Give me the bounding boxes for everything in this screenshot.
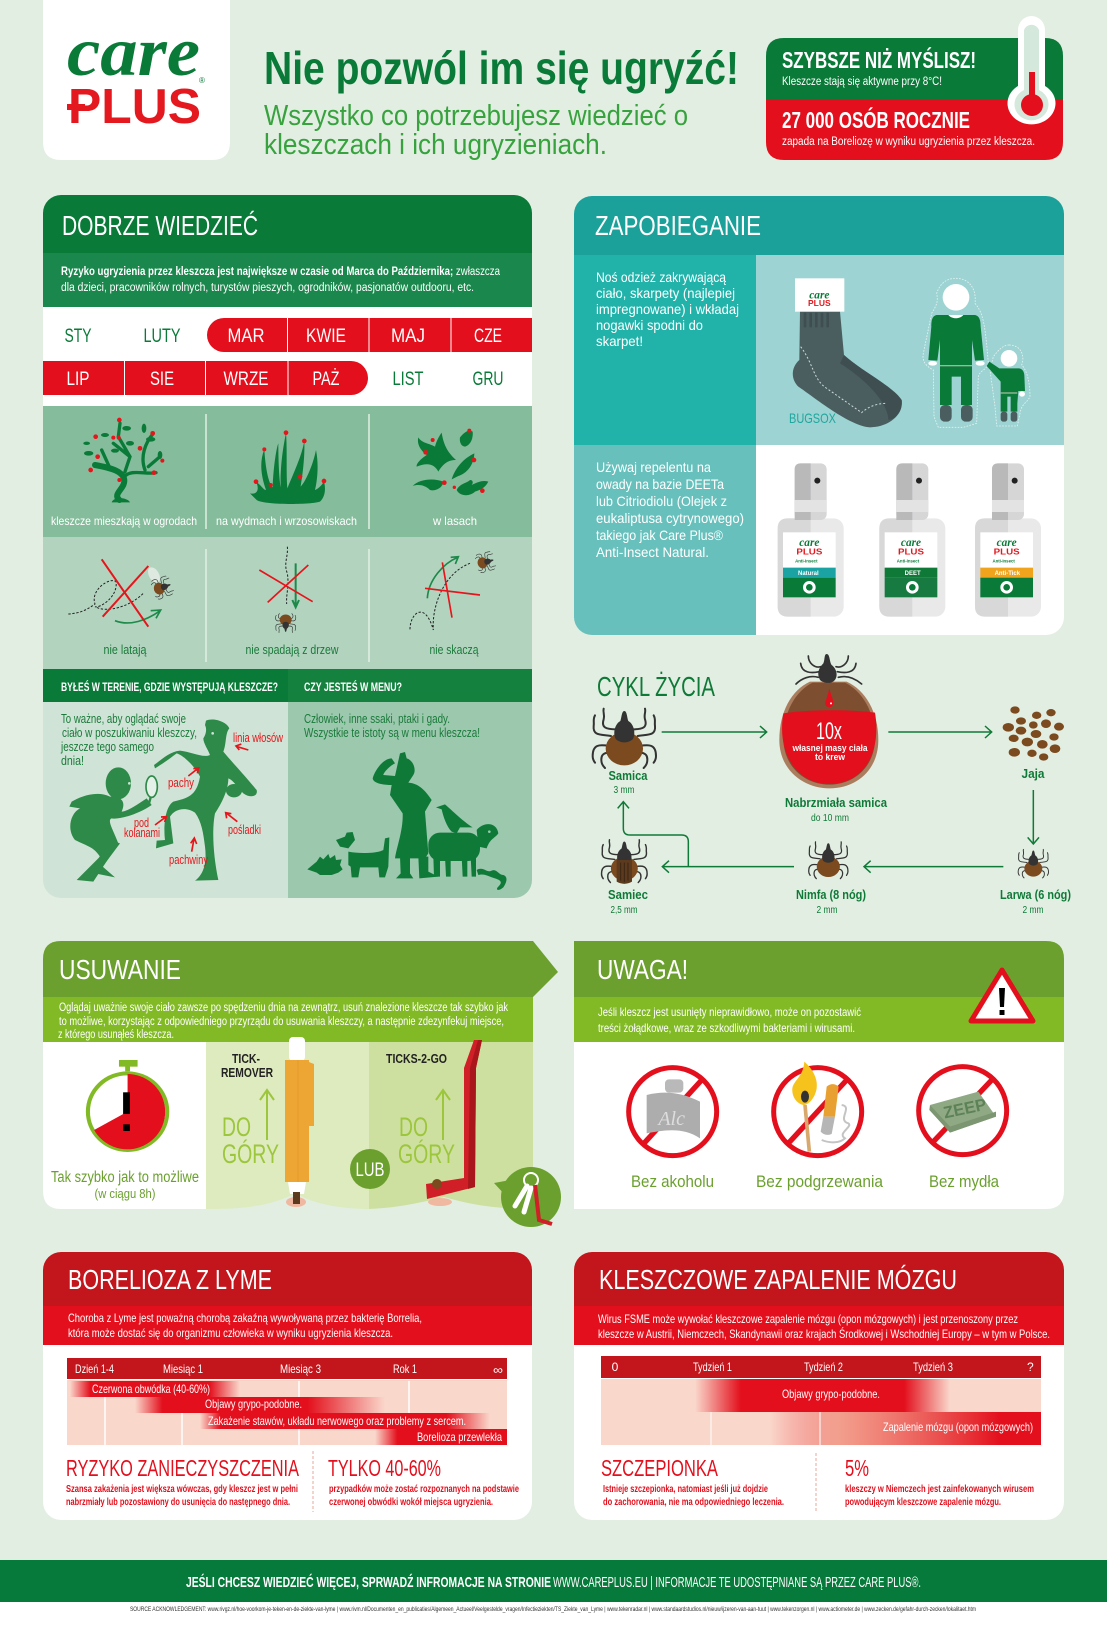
subpanel: body check: ciało w poszukiwaniu kleszczy, — [62, 726, 197, 740]
subpanel: menu (clipped corner) — [288, 669, 532, 898]
icon: dune grass — [250, 430, 326, 504]
stage labels: 2 mm — [1022, 905, 1044, 916]
badge: lub — [350, 1149, 390, 1189]
timeline chart: 0 — [612, 1360, 619, 1374]
blood stat: własnej masy ciała — [792, 743, 868, 753]
stat: vaccine: Istnieje szczepionka, natomiast jeśli już dojdzie — [603, 1483, 768, 1495]
column: tick remover — [206, 1042, 533, 1212]
icon: larva tick — [1018, 849, 1049, 878]
icon: bottle anti-tick: Anti-Insect — [992, 559, 1015, 564]
stat: risk: Szansa zakażenia jest większa wówczas, gdy kleszcz jest w pełni — [66, 1483, 298, 1495]
timeline chart — [601, 1356, 1041, 1445]
arrows — [618, 726, 1039, 873]
icon: female tick — [593, 709, 656, 768]
stat box: 27 000 OSÓB ROCZNIE — [782, 106, 970, 133]
heading band — [574, 1252, 1064, 1306]
repellent products — [756, 445, 1064, 635]
timeline chart: Objawy grypo-podobne. — [782, 1387, 880, 1401]
icon: bottle natural: care — [799, 537, 819, 549]
subpanel: body check: jeszcze tego samego — [60, 740, 154, 754]
icon: nymph tick — [809, 842, 848, 879]
timeline chart: Dzień 1-4 — [75, 1362, 114, 1376]
month calendar: WRZE — [224, 369, 268, 390]
timeline chart: Borelioza przewlekła — [417, 1430, 502, 1444]
myths row — [43, 537, 532, 669]
timeline chart: Tydzień 2 — [804, 1360, 843, 1374]
icon: bottle anti-tick: care — [997, 537, 1017, 549]
icon: garden tree — [83, 418, 164, 502]
stage labels: Larwa (6 nóg) — [1000, 887, 1071, 902]
timeline chart: Miesiąc 1 — [163, 1362, 203, 1376]
repellent advice text: takiego jak Care Plus® — [596, 527, 724, 543]
product: tick remover: REMOVER — [221, 1065, 273, 1080]
intro text — [43, 253, 532, 307]
stat: 5% — [845, 1455, 1034, 1508]
month calendar: LUTY — [144, 326, 181, 347]
section: life cycle — [593, 654, 1071, 916]
repellent advice text — [574, 445, 756, 635]
month calendar: CZE — [474, 326, 502, 347]
icon: no soap: ZEEP — [942, 1095, 988, 1122]
product: ticks-2-go: GÓRY — [398, 1138, 455, 1169]
month calendar: KWIE — [306, 326, 346, 347]
body part labels — [124, 731, 284, 867]
icon: no heating — [774, 1062, 862, 1156]
clothing advice text: Noś odzież zakrywającą — [596, 269, 726, 285]
subpanel: menu (clipped corner): CZY JESTEŚ W MENU? — [304, 679, 402, 694]
icon: bugsox sock: care — [809, 289, 829, 301]
icon: bottle anti-tick — [975, 463, 1041, 617]
heading band: DOBRZE WIEDZIEĆ — [62, 210, 258, 241]
product: tick remover: GÓRY — [222, 1138, 279, 1169]
repellent advice text: Anti-Insect Natural. — [596, 544, 709, 560]
month calendar: GRU — [472, 369, 504, 390]
clothing advice text: ciało, skarpety (najlepiej — [596, 285, 735, 301]
product: tick remover: TICK- — [232, 1051, 260, 1066]
icon: bugsox sock: PLUS — [808, 298, 831, 308]
timeline chart: Objawy grypo-podobne. — [205, 1397, 302, 1411]
title: Nie pozwól im się ugryźć! — [264, 42, 739, 94]
product: tick remover — [221, 1037, 314, 1207]
panel: usuwanie — [43, 941, 561, 1227]
heading band — [574, 196, 1064, 255]
icon: keychain bubble — [494, 1167, 561, 1227]
stage labels: Samica — [608, 768, 648, 783]
caption: ogrody: kleszcze mieszkają w ogrodach — [51, 514, 197, 528]
timeline chart: Zapalenie mózgu (opon mózgowych) — [883, 1420, 1033, 1434]
heading band with arrow: USUWANIE — [59, 954, 181, 985]
icon: bottle natural: Natural — [798, 571, 819, 577]
stat: 5%: 5% — [845, 1455, 869, 1481]
clothing advice text — [574, 255, 756, 445]
month calendar: PAŻ — [312, 369, 340, 390]
panel: zapobieganie — [574, 196, 1064, 635]
icon: no alcohol — [629, 1068, 717, 1156]
caption: nie skaczą: nie skaczą — [430, 642, 479, 657]
heading band: KLESZCZOWE ZAPALENIE MÓZGU — [599, 1264, 957, 1295]
month calendar: STY — [64, 326, 92, 347]
repellent advice text: Używaj repelentu na — [596, 459, 711, 475]
heading band: UWAGA! — [597, 954, 688, 985]
stat: 40-60%: przypadków może zostać rozpoznanych na podstawie — [329, 1483, 519, 1495]
stat: 40-60% — [328, 1455, 519, 1508]
icon: no flying — [68, 559, 175, 627]
body part labels: pachy — [168, 776, 195, 790]
timeline chart: Czerwona obwódka (40-60%) — [92, 1382, 210, 1396]
caption: lasy: w lasach — [432, 514, 477, 528]
icon: covered child — [977, 345, 1030, 426]
stat: risk: RYZYKO ZANIECZYSZCZENIA — [66, 1455, 299, 1481]
body part labels: linia włosów — [233, 731, 284, 745]
instruction text: z którego usunąłeś kleszcza. — [58, 1029, 174, 1041]
stat box: SZYBSZE NIŻ MYŚLISZ! — [782, 46, 976, 73]
timeline chart: Tydzień 3 — [913, 1360, 953, 1374]
intro text: Choroba z Lyme jest poważną chorobą zakaźną wywoływaną przez bakterię Borrelia, — [68, 1311, 422, 1325]
month calendar: LIST — [392, 369, 424, 390]
clothing advice text: nogawki spodni do — [596, 317, 703, 333]
subpanel: body check: BYŁEŚ W TERENIE, GDZIE WYSTĘPUJĄ KLESZCZE? — [61, 679, 278, 694]
timeline chart: ? — [1027, 1360, 1034, 1374]
warning text: treści żołądkowe, wraz ze szkodliwymi bakteriami i wirusami. — [598, 1021, 855, 1035]
icon: male tick — [602, 840, 647, 884]
intro text: dla dzieci, pracowników rolnych, turystów pieszych, ogrodników, pasjonatów outdooru, etc. — [61, 282, 474, 294]
stage labels: Nimfa (8 nóg) — [796, 887, 866, 902]
product: ticks-2-go: TICKS-2-GO — [386, 1051, 447, 1066]
caption: no soap: Bez mydła — [929, 1172, 999, 1191]
stat: vaccine: do zachorowania, nie ma odpowiedniego leczenia. — [603, 1496, 784, 1508]
subtitle — [264, 100, 688, 161]
warning text: Jeśli kleszcz jest usunięty nieprawidłowo, może on pozostawić — [598, 1005, 861, 1019]
footer band — [0, 1560, 1107, 1602]
stage labels: Jaja — [1022, 766, 1045, 781]
stat box — [766, 38, 1063, 160]
repellent advice text: owady na bazie DEETa — [596, 476, 724, 492]
icon: bottle natural: Anti-Insect — [795, 559, 818, 564]
stat box: Kleszcze stają się aktywne przy 8°C! — [782, 76, 942, 88]
icon: bottle deet: PLUS — [898, 547, 924, 557]
stat box: zapada na Boreliozę w wyniku ugryzienia przez kleszcza. — [782, 136, 1035, 148]
stage labels: 3 mm — [614, 785, 634, 796]
timeline chart: ∞ — [493, 1363, 503, 1377]
blood stat: 10x — [816, 718, 842, 745]
body part labels: pachwiny — [169, 853, 209, 867]
icon: red arrows — [155, 744, 248, 852]
icon: no alcohol: Alc — [656, 1108, 685, 1130]
repellent advice text: eukaliptusa cytrynowego) — [596, 510, 744, 526]
icon: bottle deet — [879, 463, 945, 617]
timeline chart: Tydzień 1 — [693, 1360, 732, 1374]
logo card: ® — [199, 76, 205, 85]
subpanel: body check: dnia! — [61, 754, 84, 768]
instruction text — [43, 997, 533, 1042]
blood stat — [792, 718, 868, 762]
forbidden list — [574, 1042, 1064, 1209]
icon: eggs — [1003, 706, 1064, 761]
stat: 5%: kleszczy w Niemczech jest zainfekowanych wirusem — [845, 1483, 1034, 1495]
month calendar: SIE — [150, 369, 174, 390]
intro text: Ryzyko ugryzienia przez kleszcza jest największe w czasie od Marca do Października; zwłaszcza — [61, 266, 500, 278]
subpanel: body check: To ważne, aby oglądać swoje — [61, 712, 186, 726]
instruction text: to możliwe, korzystając z odpowiedniego przyrządu do usuwania kleszczy, a następnie zdezynfekuj miejsce, — [59, 1016, 504, 1028]
logo card — [43, 0, 230, 160]
caption: no heating: Bez podgrzewania — [756, 1172, 883, 1191]
body part labels: pod — [134, 816, 149, 830]
subpanel: menu (clipped corner): Wszystkie te istoty są w menu kleszcza! — [304, 726, 480, 740]
stat: 5%: powodującym kleszczowe zapalenie mózgu. — [845, 1496, 1001, 1508]
stage labels: Samiec — [608, 887, 648, 902]
footer band: JEŚLI CHCESZ WIEDZIEĆ WIĘCEJ, SPRWADŹ INFROMACJE NA STRONIE — [186, 1573, 551, 1591]
caption: wydmy: na wydmach i wrzosowiskach — [216, 514, 357, 528]
timeline chart — [67, 1358, 507, 1445]
column: stopwatch: Tak szybko jak to możliwe — [51, 1169, 199, 1186]
clothing illustration panel — [756, 255, 1064, 445]
clothing advice text: skarpet! — [596, 333, 643, 349]
icon: thermometer — [1007, 16, 1056, 124]
stat: risk: nabrzmiały lub pozostawiony do usunięcia do następnego dnia. — [66, 1496, 290, 1508]
icon: engorged tick — [779, 654, 878, 788]
month calendar: LIP — [66, 369, 90, 390]
subpanel: body check — [43, 669, 288, 898]
month calendar: MAJ — [391, 326, 425, 347]
icon: bottle anti-tick: PLUS — [994, 547, 1020, 557]
icon: bottle deet: care — [901, 537, 921, 549]
heading band: ZAPOBIEGANIE — [595, 210, 761, 241]
icon: bottle anti-tick: Anti-Tick — [995, 571, 1021, 577]
product: ticks-2-go: DO — [399, 1112, 428, 1142]
icon: covered adult — [923, 278, 988, 427]
product: tick remover: DO — [222, 1112, 251, 1142]
instruction text: Oglądaj uważnie swoje ciało zawsze po spędzeniu dnia na zewnątrz, usuń znalezione kleszcze tak szybko jak — [59, 1002, 508, 1014]
icon: bottle natural: PLUS — [796, 547, 823, 557]
heading: CYKL ŻYCIA — [597, 671, 715, 702]
stat: vaccine — [601, 1455, 784, 1508]
stage labels: Nabrzmiała samica — [785, 795, 888, 810]
illustration: woman with magnifier — [69, 767, 157, 882]
stat: risk — [66, 1455, 299, 1508]
panel: borelioza — [43, 1252, 532, 1520]
clothing advice text: impregnowane) i wkładaj — [596, 301, 739, 317]
caption: no alcohol: Bez akoholu — [631, 1172, 714, 1191]
body part labels: pośladki — [228, 823, 261, 837]
product label: bugsox: BUGSOX — [789, 410, 837, 426]
blood stat: to krew — [815, 752, 846, 762]
caption: nie latają: nie latają — [104, 642, 147, 657]
stat: vaccine: SZCZEPIONKA — [601, 1455, 718, 1481]
month calendar: MAR — [228, 326, 264, 347]
column: stopwatch: (w ciągu 8h) — [94, 1186, 156, 1201]
stage labels: 2 mm — [816, 905, 838, 916]
repellent advice text: lub Citriodiolu (Olejek z — [596, 493, 727, 509]
warning text — [574, 997, 1064, 1042]
icon: bottle deet: DEET — [905, 571, 921, 577]
caption: nie spadają: nie spadają z drzew — [246, 642, 339, 657]
heading band — [43, 195, 532, 253]
habitats row — [43, 406, 532, 537]
panel: uwaga — [574, 941, 1064, 1209]
illustration: man silhouette — [154, 720, 257, 881]
logo card: PLUS — [68, 80, 201, 134]
heading band: BORELIOZA Z LYME — [68, 1264, 272, 1295]
icon: no jumping — [410, 551, 497, 630]
intro text — [43, 1306, 532, 1345]
intro text — [574, 1306, 1064, 1345]
icon: bugsox sock — [793, 278, 902, 427]
timeline chart: Zakażenie stawów, układu nerwowego oraz problemy z sercem. — [208, 1414, 466, 1428]
icon: no soap — [919, 1067, 1007, 1155]
icon: warning triangle — [971, 970, 1033, 1021]
panel: kleszczowe zapalenie mózgu — [574, 1252, 1064, 1520]
heading band — [43, 1252, 532, 1306]
icon: no falling — [259, 547, 313, 633]
stat: 40-60%: TYLKO 40-60% — [328, 1455, 441, 1481]
product: ticks-2-go — [386, 1040, 482, 1206]
icon: forest leaves — [413, 429, 488, 495]
illustration: tick menu animals — [307, 752, 506, 890]
subpanel: menu (clipped corner): Człowiek, inne ssaki, ptaki i gady. — [304, 712, 450, 726]
stage labels: 2,5 mm — [610, 905, 638, 916]
column: stopwatch — [43, 1042, 206, 1209]
icon: bottle deet: Anti-Insect — [897, 559, 920, 564]
logo card: care — [67, 14, 200, 91]
timeline chart: Rok 1 — [393, 1362, 417, 1376]
stage labels — [608, 766, 1071, 916]
stat: 40-60%: czerwonej obwódki wokół miejsca ugryzienia. — [329, 1496, 493, 1508]
heading band — [574, 941, 1064, 997]
body part labels: kolanami — [124, 826, 160, 840]
month calendar — [43, 307, 532, 406]
stage labels: do 10 mm — [811, 813, 849, 824]
panel: dobrze wiedzieć — [43, 195, 532, 898]
badge: lub: LUB — [356, 1160, 384, 1181]
icon: bottle natural — [778, 463, 844, 617]
intro text: która może dostać się do organizmu człowieka w wyniku ugryzienia kleszcza. — [68, 1326, 393, 1340]
subtitle: Wszystko co potrzebujesz wiedzieć o — [264, 100, 688, 132]
timeline chart: Miesiąc 3 — [280, 1362, 321, 1376]
heading band with arrow — [43, 941, 558, 997]
subtitle: kleszczach i ich ugryzieniach. — [264, 129, 607, 161]
